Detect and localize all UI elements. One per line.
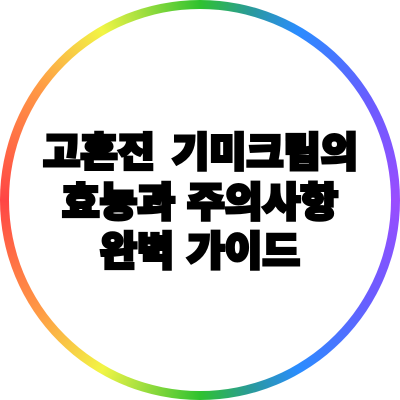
title line 2 [62,181,338,225]
title line 2: 효능과 [62,181,175,225]
title line 3: 가이드 [187,230,300,274]
title line 1: 고혼진 [43,131,155,175]
title line 2: 주의사항 [187,181,338,225]
title line 1: 기미크림의 [172,131,358,175]
title line 1 [43,131,358,175]
title line 3 [100,230,300,274]
title line 3: 완벽 [100,230,174,274]
